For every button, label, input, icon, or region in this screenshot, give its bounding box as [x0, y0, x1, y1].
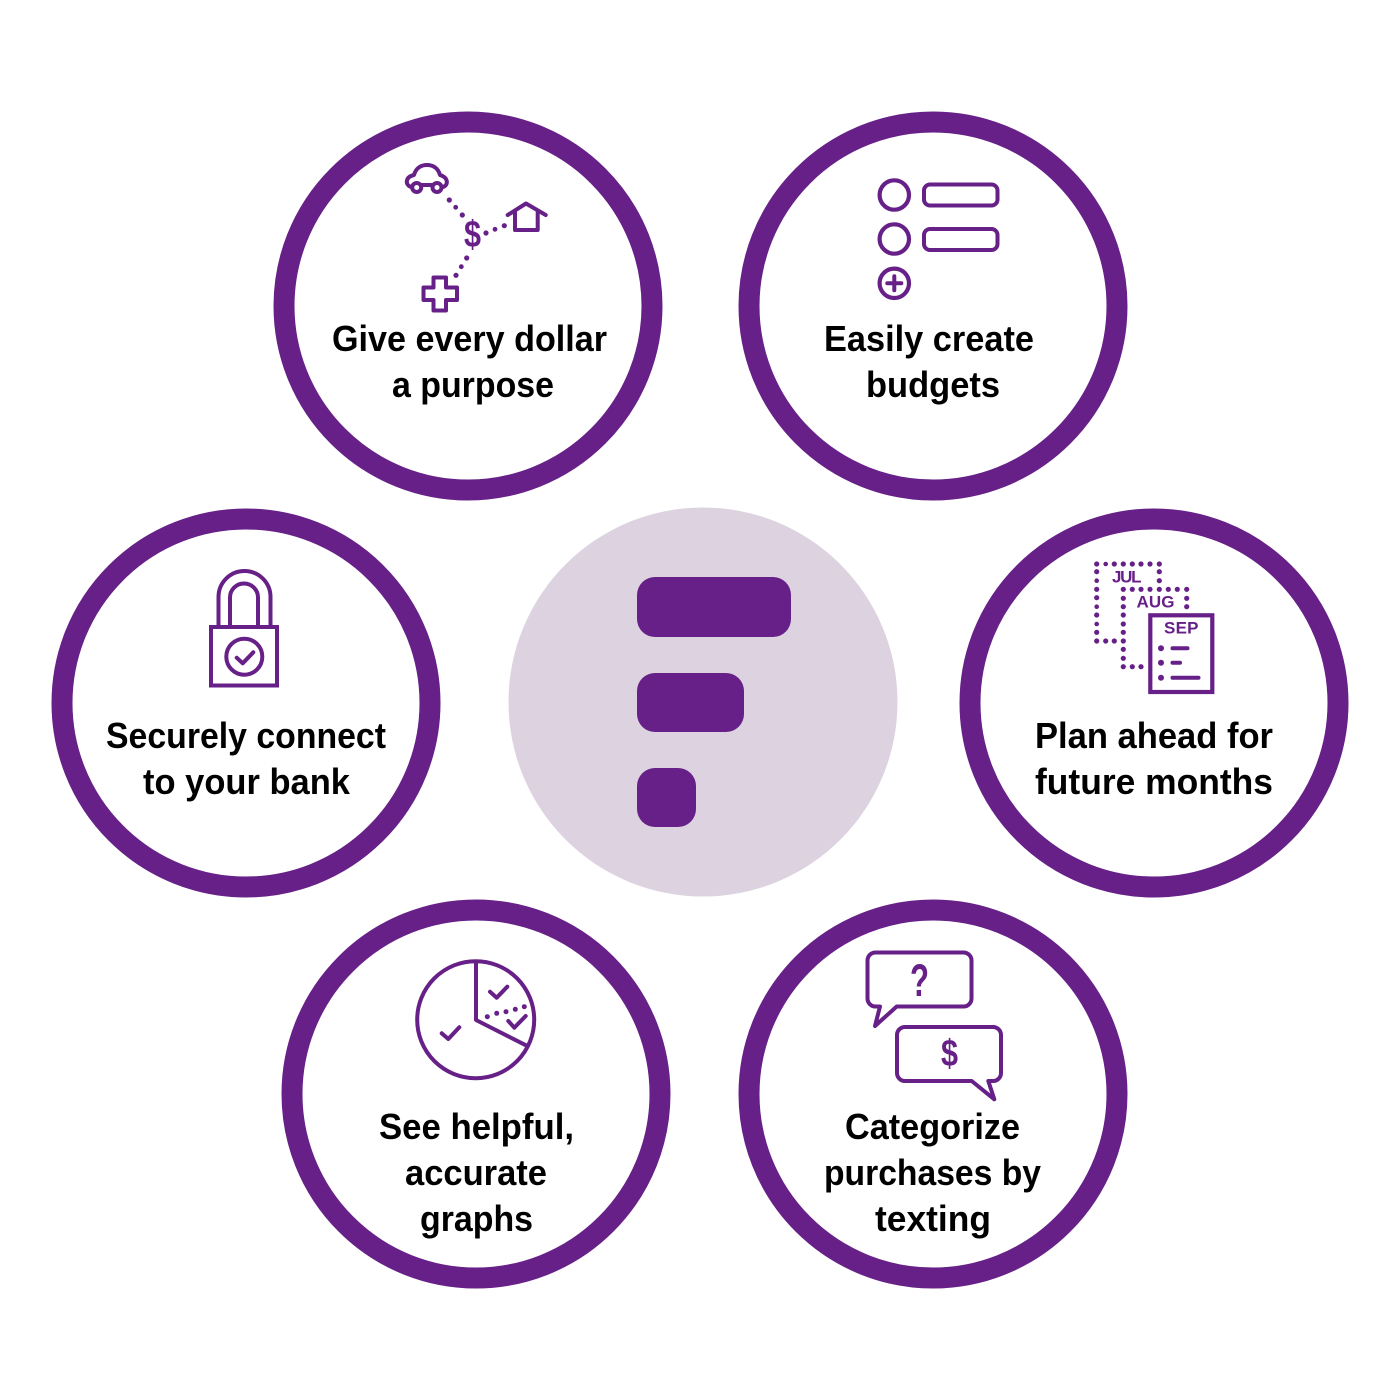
- icon: stacked monthly calendars: SEP: [1164, 618, 1198, 637]
- label: See helpful,: [379, 1106, 574, 1147]
- label: a purpose: [392, 364, 554, 405]
- label: [379, 1106, 574, 1239]
- label: Securely connect: [106, 715, 386, 756]
- panel: categorize purchases by texting: [749, 910, 1117, 1278]
- panel: easily create budgets: [749, 122, 1117, 490]
- label: purchases by: [824, 1152, 1041, 1193]
- icon: dollar branching to car, house and medical cross: $: [464, 214, 481, 256]
- label: [824, 318, 1034, 405]
- label: [824, 1106, 1041, 1239]
- panel: see helpful, accurate graphs: [292, 910, 660, 1278]
- icon: dollar branching to car, house and medical cross: [407, 165, 546, 310]
- icon: padlock with check: [211, 571, 277, 686]
- label: future months: [1035, 761, 1273, 802]
- label: graphs: [420, 1198, 533, 1239]
- label: [1035, 715, 1273, 802]
- label: [106, 715, 386, 802]
- panel: give every dollar a purpose: [284, 122, 652, 490]
- label: Easily create: [824, 318, 1034, 359]
- label: Give every dollar: [332, 318, 607, 359]
- panel: securely connect to your bank: [62, 519, 430, 887]
- icon: pie chart with checks: [417, 961, 534, 1078]
- label: [332, 318, 607, 405]
- icon: chat bubbles: ?: [910, 955, 929, 1006]
- icon: budget list: [880, 180, 998, 298]
- label: accurate: [405, 1152, 547, 1193]
- icon: stacked monthly calendars: AUG: [1136, 593, 1174, 612]
- icon: stacked monthly calendars: [1094, 561, 1212, 692]
- center logo badge: [508, 508, 898, 896]
- icon: chat bubbles: [868, 952, 1001, 1099]
- icon: stacked monthly calendars: JUL: [1112, 568, 1142, 587]
- label: Categorize: [845, 1106, 1020, 1147]
- label: texting: [875, 1198, 991, 1239]
- label: to your bank: [143, 761, 351, 802]
- label: Plan ahead for: [1035, 715, 1273, 756]
- icon: chat bubbles: $: [941, 1033, 958, 1075]
- panel: plan ahead for future months: [970, 519, 1338, 887]
- label: budgets: [866, 364, 1000, 405]
